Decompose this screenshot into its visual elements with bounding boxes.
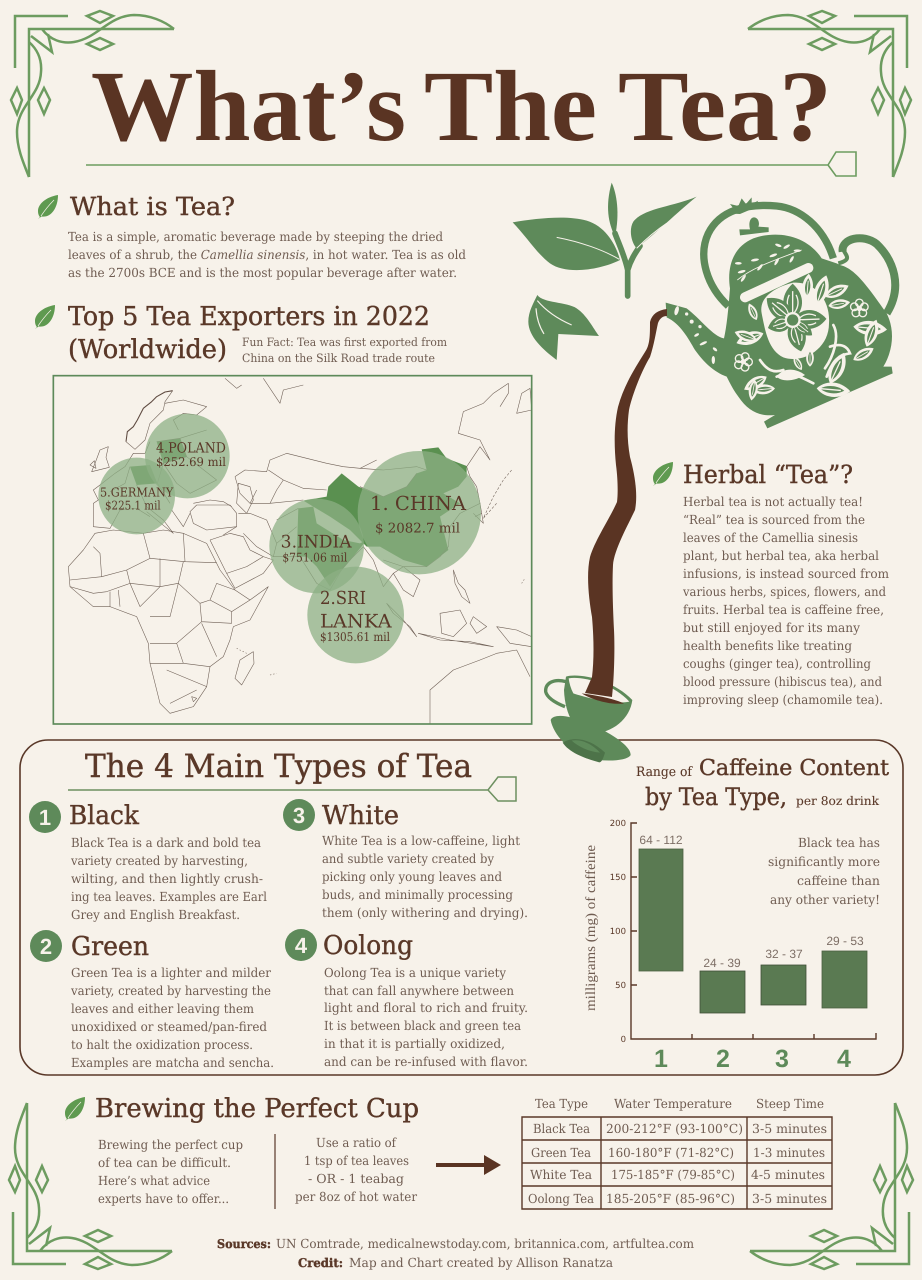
x axis categories: 1 bbox=[654, 1045, 668, 1073]
text block: brewing intro: experts have to offer... bbox=[98, 1191, 229, 1206]
x axis categories: 2 bbox=[716, 1045, 730, 1073]
label: germany: $225.1 mil bbox=[105, 499, 161, 512]
text block: brewing intro: of tea can be difficult. bbox=[98, 1155, 231, 1170]
table: brewing guide: Water Temperature bbox=[614, 1096, 732, 1111]
table: brewing guide: 4-5 minutes bbox=[751, 1167, 825, 1182]
text block: green tea: variety, created by harvesting the bbox=[70, 983, 271, 998]
sources and credit: UN Comtrade, medicalnewstoday.com, britannica.com, artfultea.com bbox=[276, 1236, 694, 1251]
text block: fun fact bbox=[242, 335, 447, 365]
text block: brewing intro: Here’s what advice bbox=[98, 1173, 210, 1188]
chart note: caffeine than bbox=[797, 873, 880, 888]
text block: ratio: 1 tsp of tea leaves bbox=[304, 1153, 409, 1168]
circle: germany bbox=[98, 458, 175, 534]
map: country outlines bbox=[68, 378, 532, 724]
heading: 4 main types of tea bbox=[68, 747, 516, 801]
heading: herbal tea: Herbal “Tea”? bbox=[683, 460, 853, 489]
table: brewing guide: 1-3 minutes bbox=[753, 1145, 825, 1160]
axis tick labels: 100 bbox=[610, 927, 626, 937]
text block: white tea: picking only young leaves and bbox=[322, 869, 502, 884]
decorative corner: top right bbox=[748, 11, 911, 177]
bar: oolong tea bbox=[822, 951, 867, 1008]
heading: caffeine content: Caffeine Content bbox=[699, 756, 889, 781]
text block: black tea: variety created by harvesting, bbox=[70, 853, 248, 868]
heading: top 5 exporters: (Worldwide) bbox=[68, 335, 227, 365]
bar: green tea bbox=[700, 971, 745, 1013]
label: germany: 5.GERMANY bbox=[100, 485, 174, 500]
axis tick labels bbox=[610, 819, 626, 1045]
badge: 4: 4 bbox=[295, 933, 308, 958]
heading: top 5 exporters: Top 5 Tea Exporters in 2022 bbox=[68, 302, 430, 332]
heading: caffeine content: Range of bbox=[636, 765, 693, 780]
heading: black: Black bbox=[69, 801, 139, 831]
heading: white: White bbox=[322, 801, 399, 831]
badge: 3: 3 bbox=[293, 803, 305, 828]
section: top 5 exporters bbox=[35, 302, 447, 365]
text block: oolong tea bbox=[324, 965, 528, 1069]
text block: green tea: to halt the oxidization process. bbox=[71, 1037, 253, 1052]
label: germany bbox=[100, 485, 174, 512]
illustration: tea stream bbox=[585, 309, 667, 697]
block: green tea bbox=[30, 930, 274, 1070]
text block: green tea: Examples are matcha and sencha. bbox=[71, 1055, 274, 1070]
text block: herbal tea explanation: fruits. Herbal tea is caffeine free, bbox=[683, 602, 884, 617]
section: brewing bbox=[65, 1094, 832, 1209]
text block: herbal tea explanation: but still enjoyed for its many bbox=[683, 620, 861, 635]
text block: herbal tea explanation: various herbs, spices, flowers, and bbox=[682, 584, 886, 599]
bar: black tea bbox=[639, 849, 683, 971]
icon: leaf bbox=[35, 305, 55, 329]
lid sprig bbox=[735, 243, 802, 282]
text block: ratio bbox=[295, 1135, 417, 1204]
icon: leaf bbox=[65, 1097, 85, 1121]
text block: brewing intro: Brewing the perfect cup bbox=[98, 1137, 243, 1152]
panel: types of tea and caffeine bbox=[20, 740, 903, 1075]
heading: top 5 exporters bbox=[68, 302, 430, 365]
table: brewing guide: 200-212°F (93-100°C) bbox=[606, 1121, 743, 1136]
x axis categories: 4 bbox=[837, 1045, 851, 1073]
Europe borders bbox=[110, 430, 217, 507]
circle: china bbox=[358, 451, 481, 574]
axis tick labels: 50 bbox=[615, 981, 626, 991]
text block: green tea bbox=[70, 965, 274, 1070]
badge: 2: 2 bbox=[40, 934, 52, 959]
text block: black tea: Black Tea is a dark and bold tea bbox=[71, 835, 262, 850]
title: Tea? bbox=[618, 50, 832, 162]
text block: herbal tea explanation: Herbal tea is not actually tea! bbox=[683, 494, 863, 509]
axis tick labels: 200 bbox=[610, 819, 626, 829]
circle: india bbox=[269, 499, 364, 593]
text block: herbal tea explanation bbox=[682, 494, 889, 707]
table: brewing guide: Oolong Tea bbox=[528, 1191, 594, 1206]
badge: 2 bbox=[30, 930, 62, 962]
text block: white tea bbox=[322, 833, 528, 920]
badge: 4 bbox=[285, 929, 317, 961]
axis tick labels: 0 bbox=[621, 1035, 626, 1045]
label: india: $751.06 mil bbox=[282, 551, 347, 565]
text block: herbal tea explanation: coughs (ginger tea), controlling bbox=[683, 656, 871, 671]
spout decoration bbox=[674, 306, 718, 364]
text block: white tea: buds, and minimally processing bbox=[322, 887, 513, 902]
text block: oolong tea: and can be re-infused with flavor. bbox=[324, 1054, 528, 1069]
heading: oolong: Oolong bbox=[323, 931, 413, 961]
bar value labels: 32 - 37 bbox=[765, 947, 803, 961]
table: brewing guide bbox=[522, 1096, 832, 1209]
heading: caffeine content: by Tea Type, bbox=[645, 783, 787, 811]
block: oolong tea bbox=[285, 929, 528, 1069]
heading: brewing the perfect cup: Brewing the Perfect Cup bbox=[95, 1094, 419, 1124]
table: brewing guide: Tea Type bbox=[535, 1096, 588, 1111]
label: sri lanka: $1305.61 mil bbox=[320, 630, 390, 644]
text block: definition of tea bbox=[68, 229, 466, 280]
text block: black tea: wilting, and then lightly crush- bbox=[71, 871, 263, 886]
icon: leaf bbox=[38, 195, 58, 219]
Africa bbox=[68, 530, 268, 713]
chart note: significantly more bbox=[768, 854, 880, 869]
label: sri lanka: LANKA bbox=[320, 610, 392, 632]
section: what is tea bbox=[38, 192, 466, 280]
text block: fun fact: China on the Silk Road trade route bbox=[242, 351, 435, 365]
text block: definition of tea: as the 2700s BCE and is the most popular beverage after water. bbox=[68, 265, 457, 280]
label: poland bbox=[156, 440, 226, 469]
text block: green tea: unoxidixed or steamed/pan-fired bbox=[71, 1019, 267, 1034]
label: india: 3.INDIA bbox=[281, 532, 352, 552]
table: brewing guide: 3-5 minutes bbox=[752, 1121, 827, 1136]
table: brewing guide: 3-5 minutes bbox=[752, 1191, 827, 1206]
decorative corner: bottom left bbox=[9, 1103, 172, 1269]
bar value labels: 64 - 112 bbox=[639, 833, 683, 847]
sources and credit bbox=[217, 1236, 694, 1270]
sources and credit: Credit: bbox=[298, 1256, 343, 1270]
label: sri lanka bbox=[320, 587, 392, 644]
bar: white tea bbox=[761, 965, 806, 1005]
text block: herbal tea explanation: leaves of the Camellia sinesis bbox=[683, 530, 858, 545]
table: brewing guide: Black Tea bbox=[533, 1121, 591, 1136]
circle: sri lanka bbox=[307, 567, 404, 663]
badge: 1 bbox=[29, 801, 61, 833]
bar value labels: 24 - 39 bbox=[703, 956, 741, 970]
heading: caffeine content: per 8oz drink bbox=[796, 794, 880, 808]
table: brewing guide: 185-205°F (85-96°C) bbox=[606, 1191, 735, 1206]
map panel: top exporters bbox=[53, 376, 532, 724]
text block: oolong tea: It is between black and green tea bbox=[324, 1018, 521, 1033]
block: black tea bbox=[29, 801, 267, 922]
heading: green: Green bbox=[71, 932, 149, 962]
text block: oolong tea: that can fall anywhere between bbox=[324, 983, 514, 998]
chart note: Black tea has bbox=[798, 835, 880, 850]
bar value labels bbox=[639, 833, 864, 970]
sources and credit: Sources: bbox=[217, 1237, 271, 1251]
section: herbal tea bbox=[653, 460, 889, 707]
teapot floral decoration bbox=[674, 243, 888, 401]
heading: 4 main types of tea: The 4 Main Types of Tea bbox=[85, 747, 472, 785]
text block: herbal tea explanation: “Real” tea is sourced from the bbox=[683, 512, 865, 527]
text block: ratio: Use a ratio of bbox=[316, 1135, 397, 1150]
text block: fun fact: Fun Fact: Tea was first exported from bbox=[242, 335, 447, 349]
illustration: tea sprig bbox=[513, 183, 697, 296]
x axis categories bbox=[654, 1045, 851, 1073]
text block: green tea: leaves and either leaving them bbox=[71, 1001, 254, 1016]
label: china bbox=[370, 492, 466, 536]
decorative corner: bottom right bbox=[750, 1103, 913, 1269]
heading: caffeine content bbox=[636, 756, 889, 811]
label: china: 1. CHINA bbox=[370, 492, 466, 515]
label: china: $ 2082.7 mil bbox=[375, 520, 460, 536]
table: brewing guide: 160-180°F (71-82°C) bbox=[608, 1145, 734, 1160]
text block: herbal tea explanation: health benefits like treating bbox=[683, 638, 852, 653]
text block: ratio: per 8oz of hot water bbox=[295, 1189, 417, 1204]
illustration: teacup and saucer bbox=[546, 675, 632, 762]
label: sri lanka: 2.SRI bbox=[320, 587, 366, 608]
title: What’s bbox=[91, 50, 406, 162]
text block: white tea: White Tea is a low-caffeine, light bbox=[322, 833, 520, 848]
text block: white tea: them (only withering and drying). bbox=[322, 905, 528, 920]
axis tick labels: 150 bbox=[610, 873, 626, 883]
text block: oolong tea: Oolong Tea is a unique variety bbox=[324, 965, 507, 980]
text block: black tea bbox=[70, 835, 267, 922]
block: white tea bbox=[283, 799, 528, 920]
x axis categories: 3 bbox=[775, 1045, 789, 1073]
text block: white tea: and subtle variety created by bbox=[322, 851, 495, 866]
table: brewing guide: Green Tea bbox=[531, 1145, 592, 1160]
text block: herbal tea explanation: infusions, is instead sourced from bbox=[683, 566, 889, 581]
illustration: two leaves bbox=[528, 295, 599, 360]
divider bbox=[274, 1134, 276, 1209]
title: The bbox=[424, 50, 597, 162]
decorative corner: top left bbox=[11, 11, 174, 177]
text block: brewing intro bbox=[98, 1137, 243, 1206]
title underline with tag bbox=[86, 152, 856, 176]
text block: herbal tea explanation: improving sleep (chamomile tea). bbox=[683, 692, 883, 707]
illustration: teapot bbox=[666, 197, 895, 428]
chart note bbox=[768, 835, 880, 907]
circle: poland bbox=[145, 414, 230, 498]
text block: ratio: - OR - 1 teabag bbox=[308, 1171, 404, 1186]
table: brewing guide: 175-185°F (79-85°C) bbox=[611, 1167, 735, 1182]
text block: green tea: Green Tea is a lighter and milder bbox=[71, 965, 271, 980]
badge: 3 bbox=[283, 799, 315, 831]
label: india bbox=[281, 532, 352, 565]
text block: definition of tea: leaves of a shrub, the Camellia sinensis, in hot water. Tea is as old bbox=[68, 247, 466, 262]
bar value labels: 29 - 53 bbox=[826, 934, 864, 948]
bar chart: caffeine range bbox=[584, 819, 880, 1073]
badge: 1: 1 bbox=[39, 805, 51, 830]
sources and credit: Map and Chart created by Allison Ranatza bbox=[349, 1255, 614, 1270]
text block: black tea: Grey and English Breakfast. bbox=[71, 907, 240, 922]
axes bbox=[631, 823, 876, 1039]
heading: what is tea: What is Tea? bbox=[70, 192, 235, 221]
text block: oolong tea: in that it is partially oxidized, bbox=[324, 1036, 505, 1051]
table: brewing guide: White Tea bbox=[530, 1167, 593, 1182]
chart note: any other variety! bbox=[770, 892, 880, 907]
axis title: milligrams (mg) of caffeine bbox=[584, 845, 599, 1011]
table: brewing guide: Steep Time bbox=[756, 1096, 824, 1111]
arrow bbox=[436, 1155, 501, 1175]
label: poland: $252.69 mil bbox=[156, 455, 226, 469]
label: poland: 4.POLAND bbox=[156, 440, 226, 456]
text block: black tea: ing tea leaves. Examples are Earl bbox=[71, 889, 267, 904]
text block: oolong tea: light and floral to rich and fruity. bbox=[324, 1000, 528, 1015]
text block: herbal tea explanation: blood pressure (hibiscus tea), and bbox=[683, 674, 882, 689]
text block: herbal tea explanation: plant, but herbal tea, aka herbal bbox=[683, 548, 879, 563]
icon: leaf bbox=[653, 462, 673, 486]
text block: definition of tea: Tea is a simple, aromatic beverage made by steeping the dried bbox=[68, 229, 443, 244]
